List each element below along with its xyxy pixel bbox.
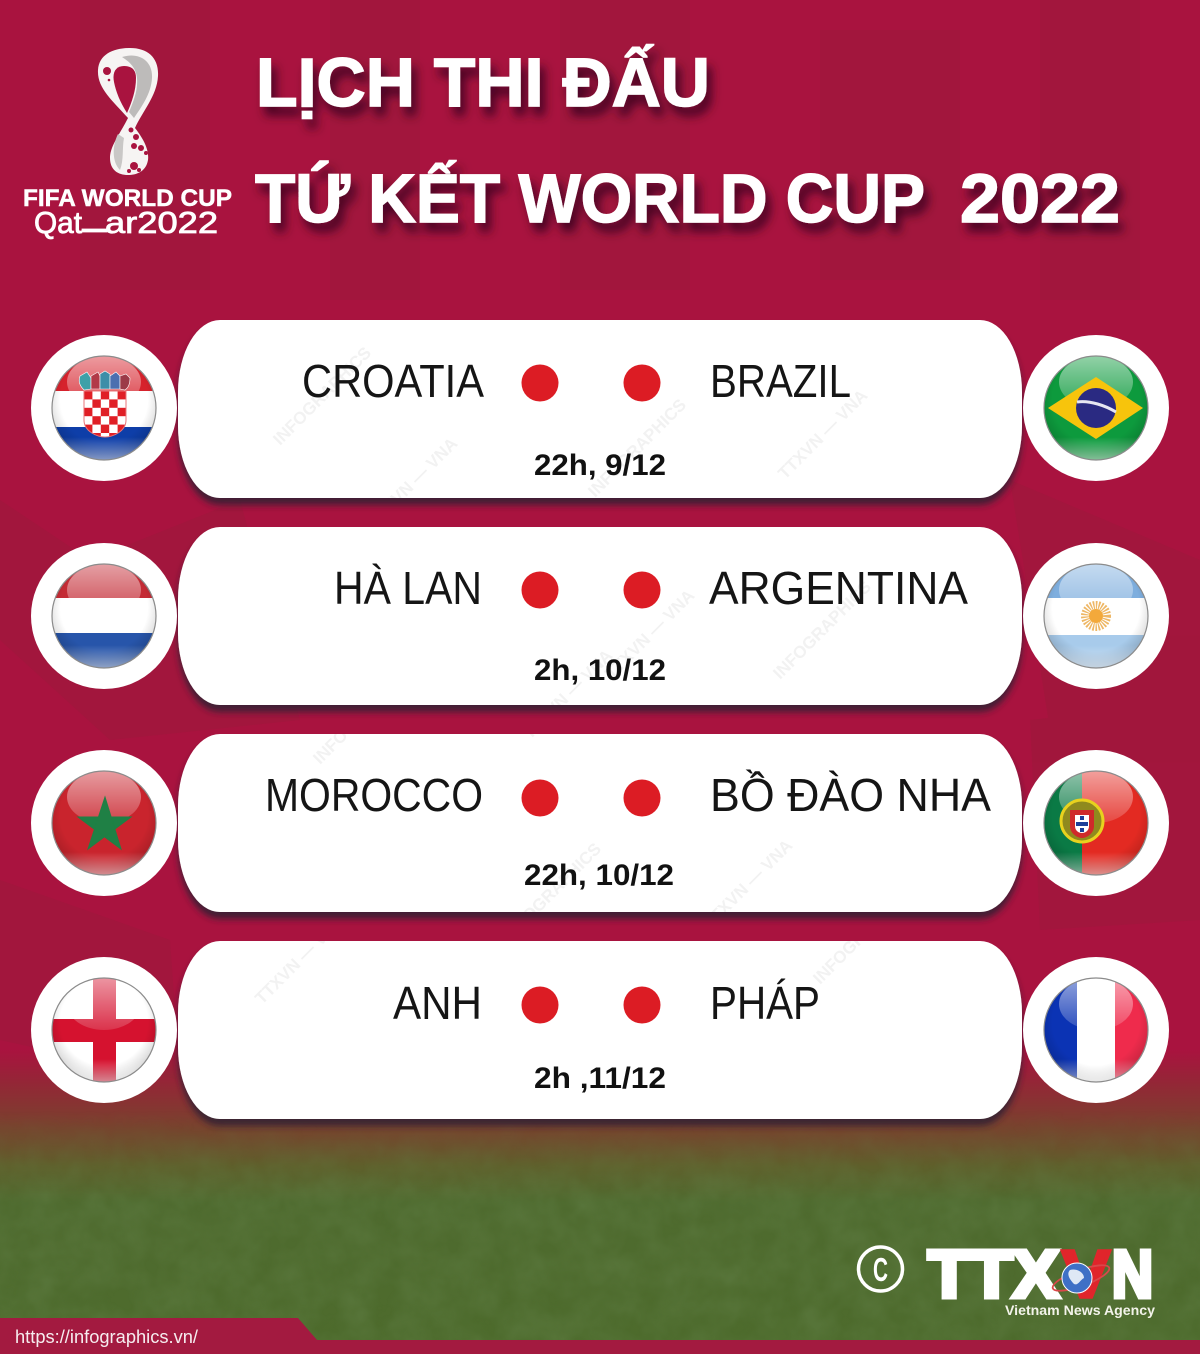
card watermarks: TTXVN — VNA [699,836,796,933]
team name: France: PHÁP [710,977,820,1029]
flag badge: France [1023,957,1169,1103]
card watermarks [254,941,860,1002]
card panel [178,734,1022,912]
card watermarks: TTXVN — VNA [251,911,348,1008]
flag badge: Brazil [1023,335,1169,481]
logo wordmark: FIFA WORLD CUP: FIFA WORLD CUP [23,185,232,212]
logo globe and orbit [1050,1260,1112,1296]
match rows [178,320,1022,1119]
card watermarks: TTXVN — VNA [519,646,616,743]
card panel [178,320,1022,498]
team name: Croatia: CROATIA [302,355,484,407]
card watermarks: TTXVN — VNA [519,646,616,743]
card watermarks: TTXVN — VNA [364,434,461,531]
card watermarks: INFOGRAPHICS [769,577,875,683]
logo letters TTX: TTX [928,1237,1059,1312]
score dot left [522,364,558,402]
agency logo: TTXVN Vietnam News Agency [928,1237,1156,1318]
logo tagline: Vietnam News Agency [1005,1303,1156,1318]
kickoff time: 22h, 9/12 [534,449,666,482]
logo emblem: figure-eight ribbon [98,48,158,175]
match card: Croatia vs Brazil [178,320,1022,531]
card watermarks: INFOGRAPHICS [499,839,605,945]
team name: England: ANH [393,977,482,1029]
team name: Argentina: ARGENTINA [709,562,968,614]
score dot right [624,780,660,816]
logo wordmark: Qatar2022: ar2022 [105,205,218,240]
score dot right [624,364,660,402]
background: grass pitch fading in at the bottom [0,1050,1200,1354]
card watermarks: INFOGRAPHICS [499,839,605,945]
kickoff time: 2h ,11/12 [534,1062,666,1095]
logo letter V: V [1062,1237,1110,1312]
flag badge: Morocco [31,750,177,896]
score dot left [522,986,558,1024]
logo wordmark: Qatar2022: Qat [34,205,82,240]
card watermarks [272,348,868,498]
flag badge: Portugal [1023,750,1169,896]
team name: Portugal: BỒ ĐÀO NHA [710,769,991,821]
footer bar with tab [0,1318,1200,1354]
logo: FIFA World Cup Qatar 2022 [23,48,232,240]
copyright symbol [858,1247,902,1291]
logo wordmark: Qatar2022 [34,205,218,240]
card panel [178,527,1022,705]
footer URL: https://infographics.vn/ [15,1327,198,1347]
kickoff time: 2h, 10/12 [534,654,666,687]
title [255,44,1120,237]
card watermarks [312,734,793,912]
card watermarks: INFOGRAPHICS [584,395,690,501]
flag badge: Netherlands [31,543,177,689]
copyright symbol: C [873,1251,888,1288]
match card: England vs France [173,941,1027,1130]
title line 1: LỊCH THI ĐẤU [256,44,710,121]
score dot right [624,986,660,1024]
title line 2: 2022 [960,160,1120,237]
card watermarks: INFOGRAPHICS [309,662,415,768]
card watermarks: INFOGRAPHICS [269,343,375,449]
score dot left [522,572,558,608]
score dot right [624,572,660,608]
card watermarks: TTXVN — VNA [601,586,698,683]
match card: Morocco vs Portugal [173,734,1027,924]
flag badge: Argentina [1023,543,1169,689]
kickoff time: 22h, 10/12 [524,859,674,892]
card watermarks: INFOGRAPHICS [809,882,915,988]
flag badge: Croatia [31,335,177,481]
team name: Morocco: MOROCCO [265,769,483,821]
title line 2: TỨ KẾT WORLD CUP [255,160,925,237]
card panel [178,941,1022,1119]
match card: Netherlands vs Argentina [173,527,1027,717]
team name: Brazil: BRAZIL [710,355,851,407]
card watermarks: TTXVN — VNA [364,434,461,531]
score dot left [522,780,558,816]
team name: Netherlands: HÀ LAN [334,562,482,614]
card watermarks [364,434,875,743]
flag badge: England [31,957,177,1103]
logo letter N: N [1112,1237,1153,1312]
card watermarks: TTXVN — VNA [774,386,871,483]
